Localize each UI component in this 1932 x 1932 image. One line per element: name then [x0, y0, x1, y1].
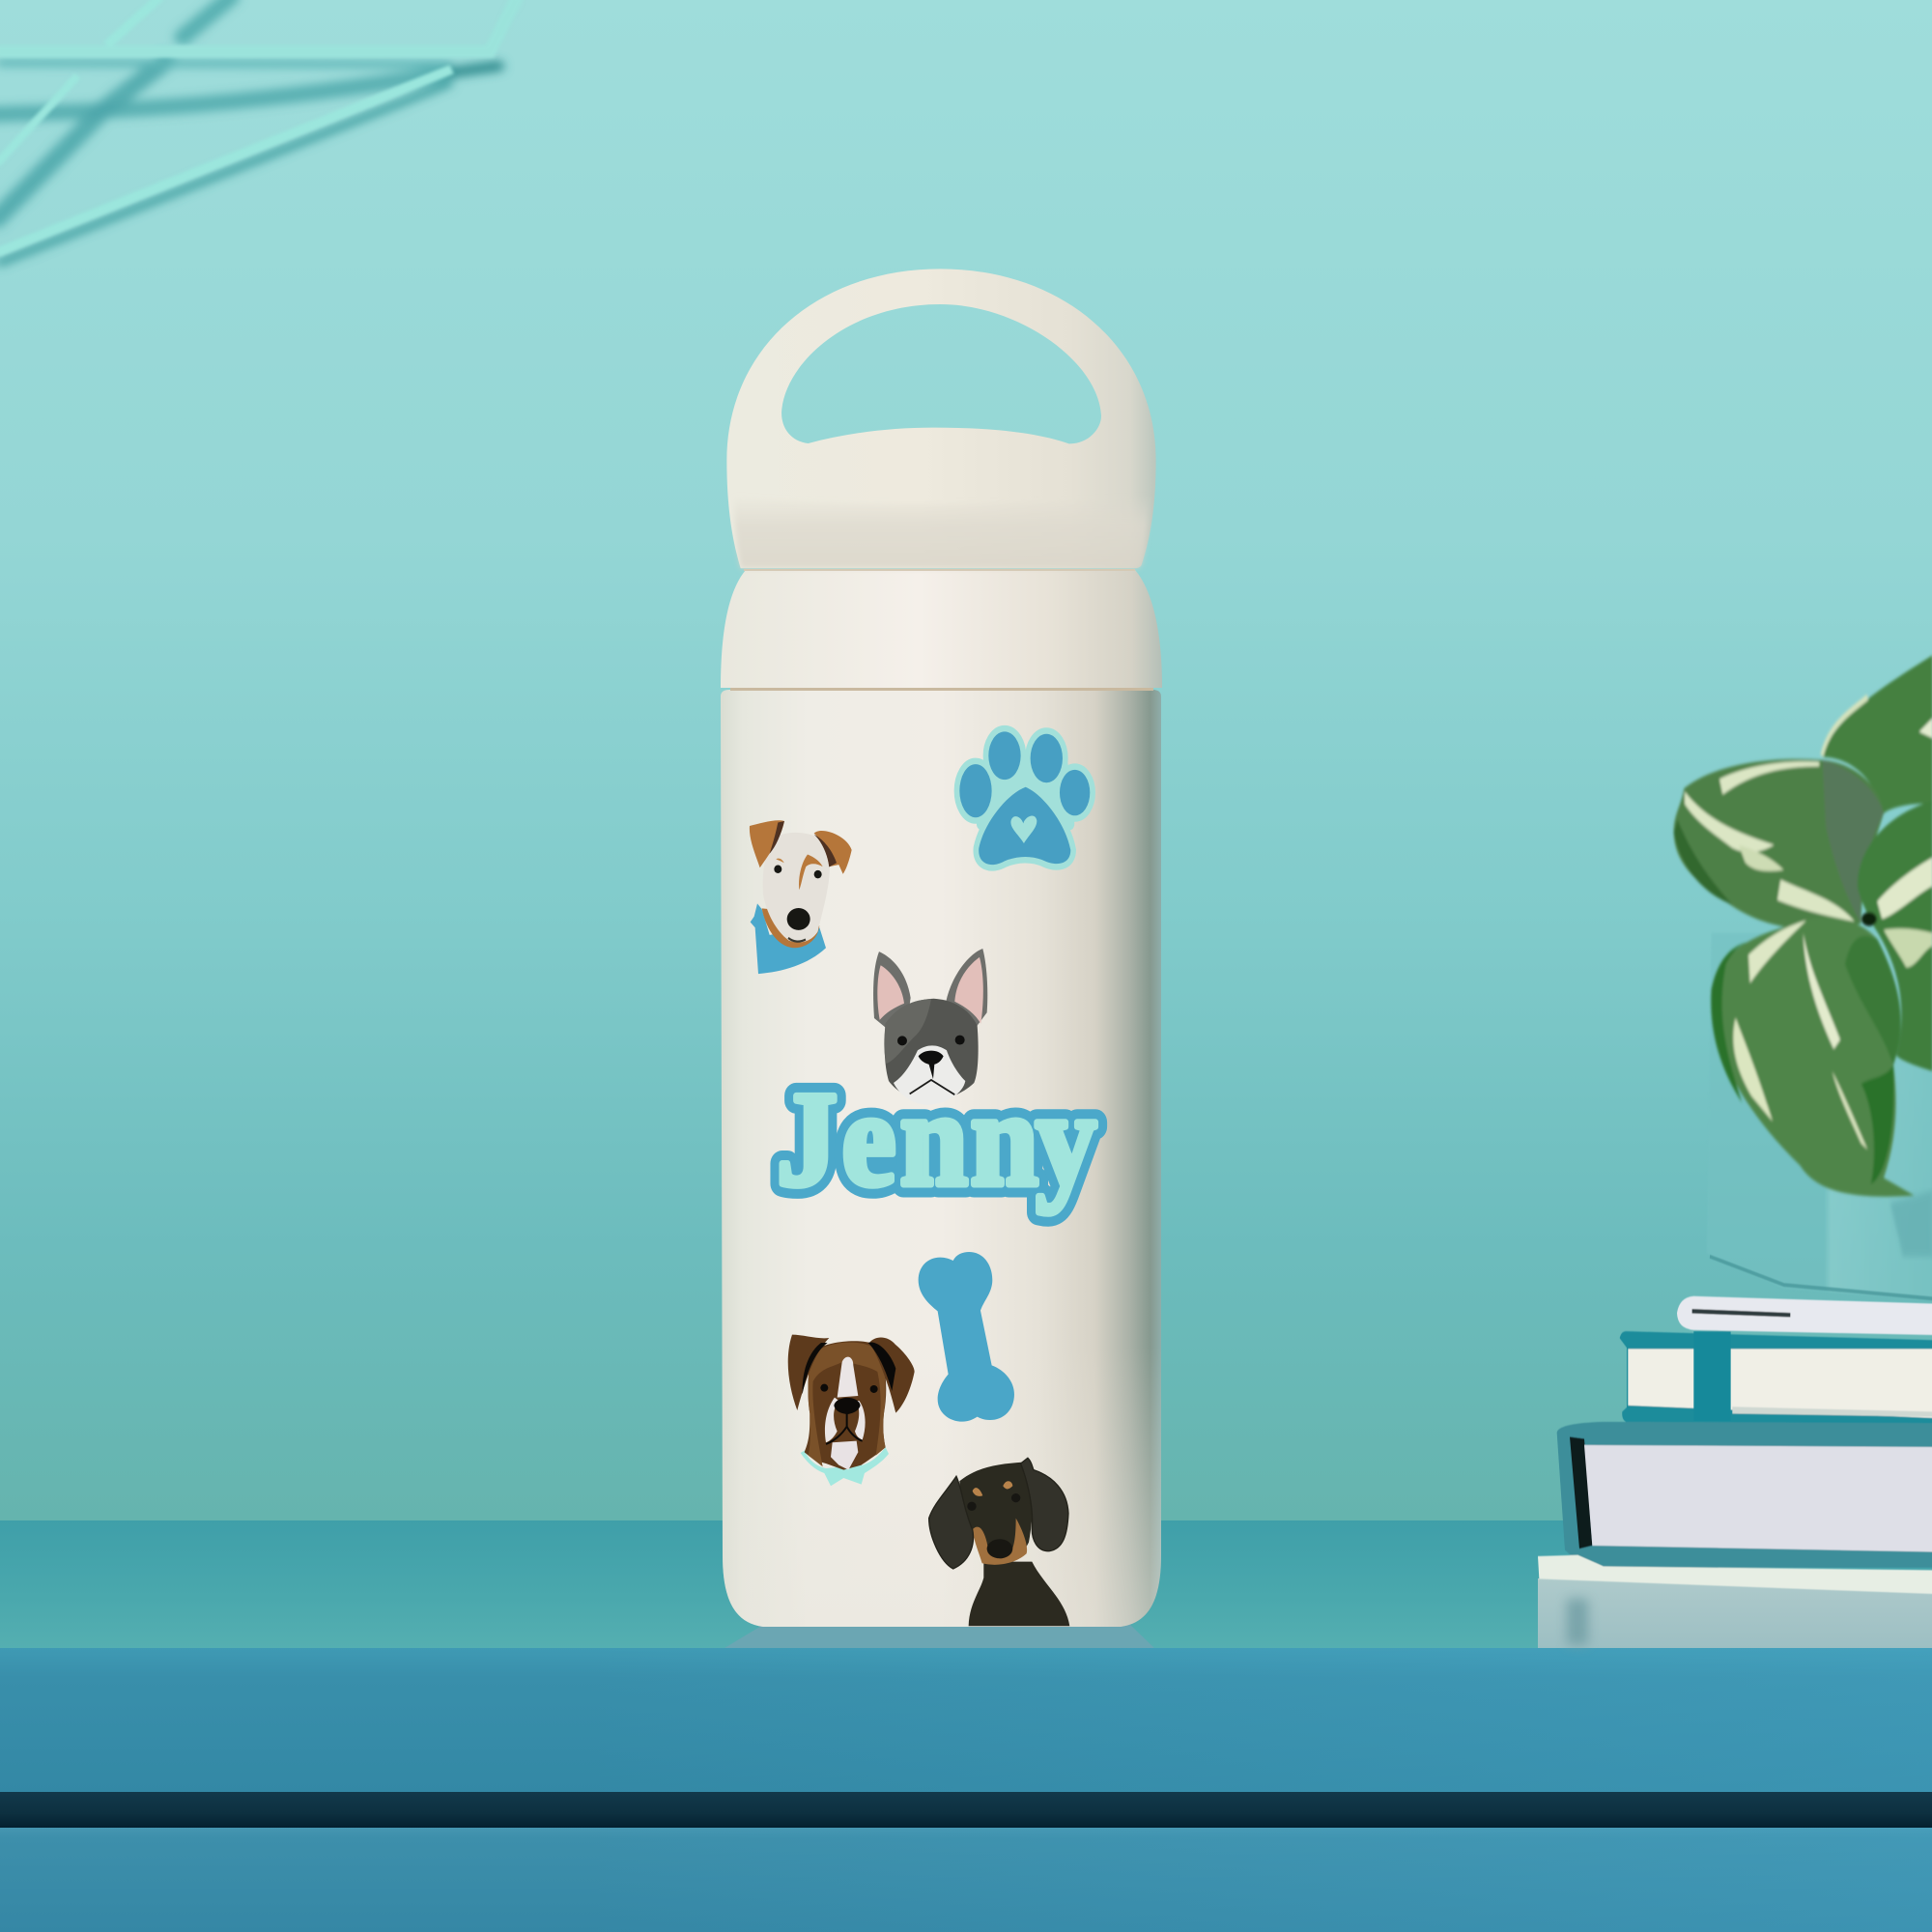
terrier eyes and nose	[774, 866, 781, 873]
boxer white blaze	[838, 1357, 858, 1398]
bulldog head	[885, 999, 979, 1101]
wire wall decoration	[0, 0, 518, 263]
dachshund left ear	[929, 1476, 973, 1569]
top right leaf	[1822, 655, 1932, 813]
lower drawer front	[0, 1826, 1932, 1932]
neck seam	[730, 688, 1153, 691]
name fill: Jenny	[777, 1064, 1096, 1213]
sticker: name Jenny	[777, 1064, 1096, 1213]
bulldog eyes and nose	[897, 1036, 907, 1045]
boxer lighter fur	[809, 1343, 886, 1466]
bottle body	[721, 690, 1161, 1627]
terrier right ear	[814, 831, 852, 874]
large hardcover book	[1557, 1422, 1932, 1568]
dachshund tan muzzle	[973, 1519, 1027, 1565]
boxer right ear	[869, 1338, 915, 1413]
bottle bottom shading	[721, 690, 1161, 1627]
front sheen	[0, 1648, 1932, 1932]
dachshund head	[959, 1462, 1033, 1564]
bulldog ears	[873, 952, 911, 1028]
sticker: boxer with bow tie	[788, 1335, 915, 1486]
sticker: paw print	[959, 731, 1090, 865]
dachshund right ear	[1021, 1458, 1068, 1551]
sticker: french bulldog	[873, 949, 987, 1105]
right leaf	[1858, 801, 1932, 1071]
terrier brow patch	[799, 854, 823, 890]
plant leaves	[1674, 655, 1932, 1197]
shelf	[0, 1520, 1932, 1932]
bottle	[721, 269, 1162, 1627]
wall background	[0, 0, 1932, 1521]
name outline: Jenny	[777, 1064, 1096, 1213]
lid seam	[744, 567, 1135, 573]
dachshund neck	[969, 1562, 1069, 1626]
paw blue pads	[959, 731, 1090, 865]
bow tie collar	[801, 1447, 889, 1486]
terrier left ear	[750, 820, 784, 867]
bottle shadow on shelf	[724, 1625, 1154, 1648]
drawer gap	[0, 1792, 1932, 1828]
elastic band	[1693, 1331, 1731, 1421]
sticker: dachshund	[929, 1458, 1069, 1626]
teal notebook	[1620, 1331, 1932, 1424]
plant centre shadow	[1861, 912, 1877, 926]
terrier head	[763, 833, 830, 942]
potted plant and book stack	[1538, 655, 1932, 1594]
bandana	[751, 903, 826, 974]
top white notebook	[1677, 1296, 1932, 1335]
lid shading band	[734, 496, 1150, 568]
white sheet under book	[1538, 1555, 1932, 1594]
paw heart	[1010, 815, 1037, 843]
collar fur	[762, 908, 819, 948]
dachshund eyes	[967, 1502, 977, 1511]
boxer head	[805, 1341, 886, 1470]
sticker: bone	[919, 1252, 1014, 1422]
bottle neck	[721, 570, 1162, 688]
books reflection on shelf	[1538, 1578, 1932, 1648]
bottle lid with handle	[726, 269, 1156, 570]
boxer left ear	[788, 1335, 829, 1410]
shelf front edge	[0, 1648, 1932, 1795]
paw mint backing	[959, 731, 1090, 865]
book stack	[1538, 1296, 1932, 1594]
reflection smudge	[1567, 1599, 1588, 1645]
shelf top surface	[0, 1520, 1932, 1649]
sticker: terrier with bandana	[750, 820, 852, 974]
left leaf	[1674, 759, 1884, 929]
bottom leaf	[1711, 918, 1915, 1197]
bulldog muzzle	[894, 1045, 965, 1105]
plant pot	[1707, 933, 1932, 1298]
boxer eyes and nose	[820, 1384, 828, 1392]
